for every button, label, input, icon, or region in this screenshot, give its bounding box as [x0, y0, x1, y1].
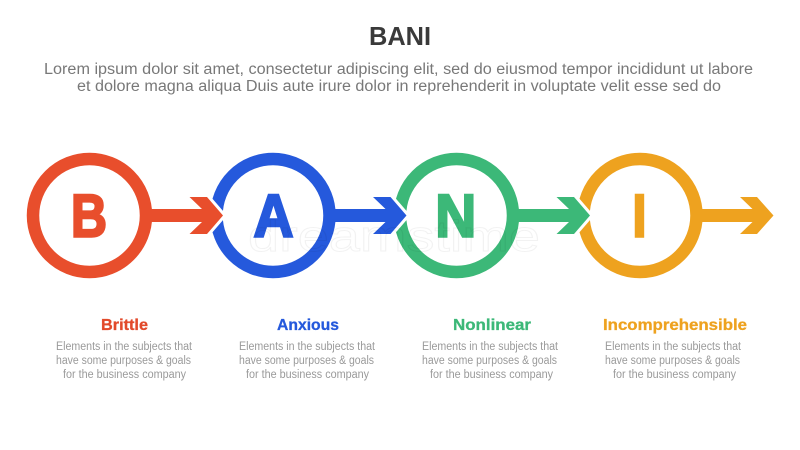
label: Nonlinear: for the business company — [430, 369, 553, 381]
title: BANI — [369, 21, 431, 51]
label: Anxious: for the business company — [246, 369, 369, 381]
label: Incomprehensible: for the business company — [613, 369, 736, 381]
arrow: Nonlinear to Incomprehensible — [516, 197, 590, 234]
watermark: dreamstime — [248, 212, 540, 261]
arrow: Anxious to Nonlinear — [333, 197, 406, 234]
step A: Anxious circle — [216, 159, 330, 272]
label: Anxious: Elements in the subjects that — [239, 341, 376, 353]
intro text — [44, 61, 753, 95]
label: Brittle: have some purposes & goals — [56, 355, 191, 367]
label: Nonlinear: have some purposes & goals — [422, 355, 557, 367]
step N: Nonlinear circle — [400, 159, 513, 272]
label: Anxious: have some purposes & goals — [239, 355, 374, 367]
step I: Incomprehensible circle: I — [632, 182, 647, 249]
label: Nonlinear: Elements in the subjects that — [422, 341, 559, 353]
label: Nonlinear: Nonlinear — [453, 317, 531, 334]
step N: Nonlinear circle: N — [435, 182, 476, 249]
label: Incomprehensible: have some purposes & goals — [605, 355, 740, 367]
label: Anxious: Anxious — [277, 317, 339, 334]
step I: Incomprehensible circle — [584, 159, 696, 272]
intro text: Lorem ipsum dolor sit amet, consectetur adipiscing elit, sed do eiusmod tempor incididunt ut labore — [44, 61, 753, 78]
arrow: Brittle to Anxious — [150, 197, 223, 234]
label: Brittle: Brittle — [101, 317, 148, 334]
label: Brittle — [56, 317, 193, 381]
label: Incomprehensible — [603, 317, 747, 381]
label: Nonlinear — [422, 317, 559, 381]
label: Anxious — [239, 317, 376, 381]
intro text: et dolore magna aliqua Duis aute irure dolor in reprehenderit in voluptate velit esse sed do — [77, 78, 721, 95]
label: Incomprehensible: Elements in the subjects that — [605, 341, 742, 353]
step B: Brittle circle: B — [71, 182, 107, 249]
step A: Anxious circle: A — [254, 182, 294, 249]
step B: Brittle circle — [33, 159, 146, 272]
label: Incomprehensible: Incomprehensible — [603, 317, 747, 334]
arrow: Incomprehensible outgoing — [700, 197, 774, 234]
label: Brittle: Elements in the subjects that — [56, 341, 193, 353]
label: Brittle: for the business company — [63, 369, 186, 381]
